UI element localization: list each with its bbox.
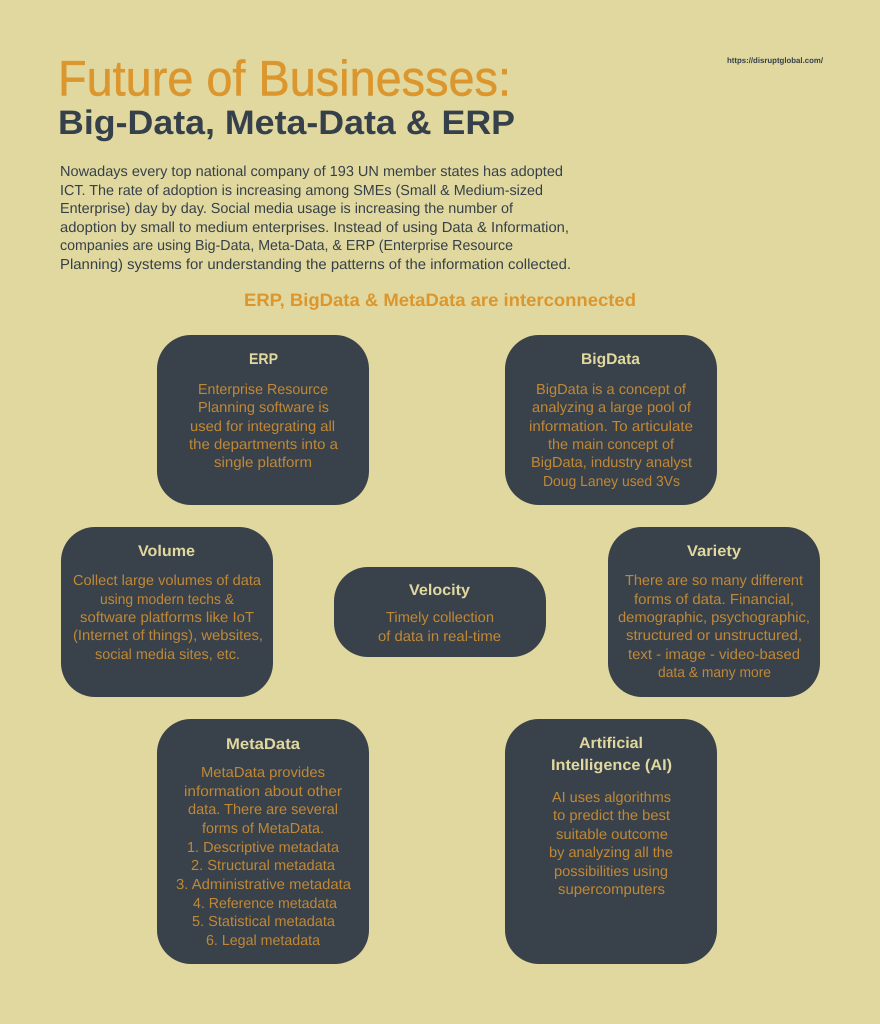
panel: BigData: BigData <box>581 351 640 368</box>
intro text block <box>60 164 571 273</box>
source url: https://disruptglobal.com/ <box>727 56 824 65</box>
panel: Volume: Collect large volumes of data <box>73 573 262 589</box>
panel: Velocity <box>334 567 546 657</box>
panel: MetaData: 5. Statistical metadata <box>192 914 336 930</box>
panel: MetaData: data. There are several <box>188 802 338 818</box>
panel: MetaData: MetaData <box>226 736 300 753</box>
panel: Volume: software platforms like IoT <box>80 610 254 626</box>
panel: Volume: (Internet of things), websites, <box>73 628 263 644</box>
panel: Velocity: Timely collection <box>386 610 494 626</box>
intro text block: ICT. The rate of adoption is increasing among SMEs (Small & Medium-sized <box>60 183 543 199</box>
panel: MetaData: forms of MetaData. <box>202 821 324 837</box>
panel: Artificial Intelligence <box>505 719 717 964</box>
section heading: ERP, BigData & MetaData are interconnected <box>244 290 636 310</box>
subtitle: Big-Data, Meta-Data & ERP <box>58 104 515 142</box>
panel: Variety: data & many more <box>658 665 771 681</box>
panel: BigData: BigData is a concept of <box>536 382 687 398</box>
panel: ERP: Planning software is <box>198 400 329 416</box>
panel: Velocity: of data in real-time <box>378 629 501 645</box>
panel: Artificial Intelligence: Artificial <box>579 735 643 752</box>
panel: BigData: the main concept of <box>548 437 675 453</box>
panel: ERP <box>157 335 369 505</box>
panel: Variety: Variety <box>687 543 741 560</box>
panel: Volume: social media sites, etc. <box>95 647 240 663</box>
panel: MetaData: 4. Reference metadata <box>193 896 338 912</box>
panel: ERP: single platform <box>214 455 312 471</box>
panel: MetaData: 1. Descriptive metadata <box>187 840 340 856</box>
intro text block: Nowadays every top national company of 193 UN member states has adopted <box>60 164 563 180</box>
panel: Artificial Intelligence: Intelligence (AI) <box>551 757 672 774</box>
intro text block: Enterprise) day by day. Social media usage is increasing the number of <box>60 201 514 217</box>
panel: MetaData: 6. Legal metadata <box>206 933 321 949</box>
panel: BigData: BigData, industry analyst <box>531 455 692 471</box>
panel: Variety: There are so many different <box>625 573 803 589</box>
panel: Volume: Volume <box>138 543 195 560</box>
panel: ERP: used for integrating all <box>190 419 335 435</box>
panel: ERP: ERP <box>249 351 278 368</box>
panel: Variety <box>608 527 820 697</box>
intro text block: Planning) systems for understanding the patterns of the information collected. <box>60 257 571 273</box>
panel: Volume: using modern techs & <box>100 592 234 608</box>
panel: Variety: demographic, psychographic, <box>618 610 810 626</box>
panel: Volume <box>61 527 273 697</box>
panel: MetaData: 3. Administrative metadata <box>176 877 352 893</box>
panel: Artificial Intelligence: by analyzing all the <box>549 845 673 861</box>
panel: MetaData: MetaData provides <box>201 765 325 781</box>
panel: MetaData <box>157 719 369 964</box>
panel: ERP: the departments into a <box>189 437 339 453</box>
panel: Artificial Intelligence: supercomputers <box>558 882 665 898</box>
panel: Artificial Intelligence: possibilities using <box>554 864 668 880</box>
panel: Artificial Intelligence: AI uses algorithms <box>552 790 671 806</box>
panel: ERP: Enterprise Resource <box>198 382 328 398</box>
panel: MetaData: information about other <box>184 784 342 800</box>
panel: Variety: structured or unstructured, <box>626 628 802 644</box>
intro text block: companies are using Big-Data, Meta-Data, & ERP (Enterprise Resource <box>60 238 513 254</box>
panel: BigData: analyzing a large pool of <box>532 400 692 416</box>
panel: Artificial Intelligence: suitable outcome <box>556 827 668 843</box>
panel: BigData: information. To articulate <box>529 419 693 435</box>
panel: BigData <box>505 335 717 505</box>
panel: Variety: text - image - video-based <box>628 647 800 663</box>
panel: MetaData: 2. Structural metadata <box>191 858 336 874</box>
intro text block: adoption by small to medium enterprises. Instead of using Data & Information, <box>60 220 569 236</box>
panel: Variety: forms of data. Financial, <box>634 592 794 608</box>
panel: Velocity: Velocity <box>409 582 470 599</box>
panel: Artificial Intelligence: to predict the best <box>553 808 670 824</box>
panel: BigData: Doug Laney used 3Vs <box>543 474 680 490</box>
title: Future of Businesses: <box>58 50 511 106</box>
